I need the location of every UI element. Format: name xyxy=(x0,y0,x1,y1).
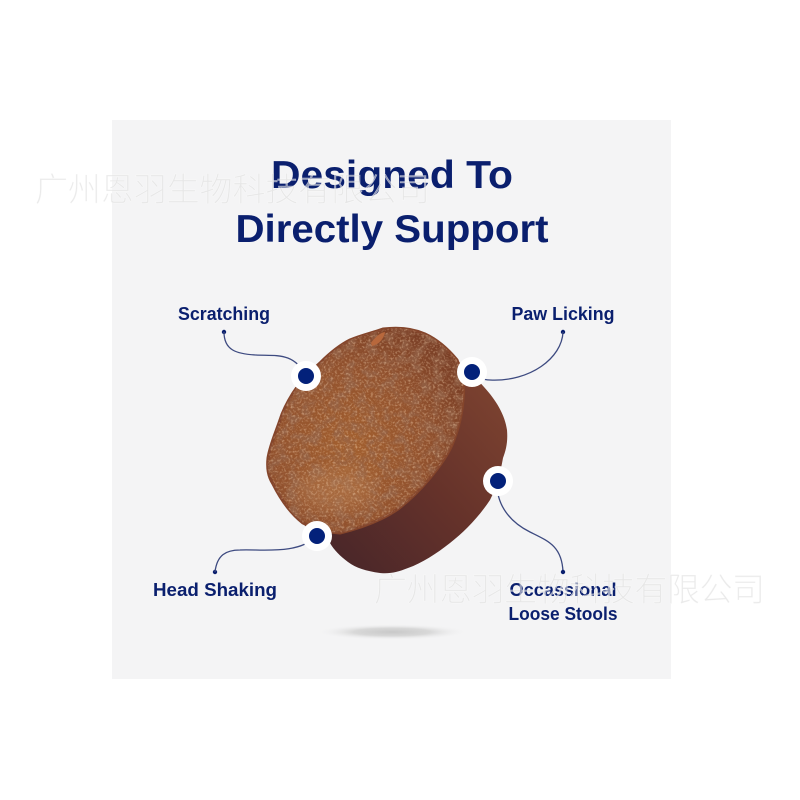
title xyxy=(236,154,549,251)
product: soft chew xyxy=(268,328,507,573)
ground shadow xyxy=(316,624,468,640)
chew top face xyxy=(268,328,464,533)
background panel xyxy=(112,120,671,679)
callout: Scratching: Scratching xyxy=(178,304,270,324)
callout: Occassional Loose Stools xyxy=(483,466,618,624)
callout: Head Shaking: Head Shaking xyxy=(153,580,277,600)
chew side wall xyxy=(303,328,507,573)
title: Directly Support xyxy=(236,208,549,251)
watermark: top left: 广州恩羽生物科技有限公司 xyxy=(35,163,430,211)
callout: Occassional Loose Stools: Occassional xyxy=(510,580,616,600)
callout: Scratching xyxy=(178,304,321,391)
callout: Paw Licking: Paw Licking xyxy=(512,304,614,324)
callout: Head Shaking xyxy=(153,521,332,600)
watermark: bottom right: 广州恩羽生物科技有限公司 xyxy=(374,563,765,611)
callout: Paw Licking xyxy=(457,304,614,387)
title: Designed To xyxy=(271,154,513,197)
callout: Occassional Loose Stools: Loose Stools xyxy=(508,604,618,624)
